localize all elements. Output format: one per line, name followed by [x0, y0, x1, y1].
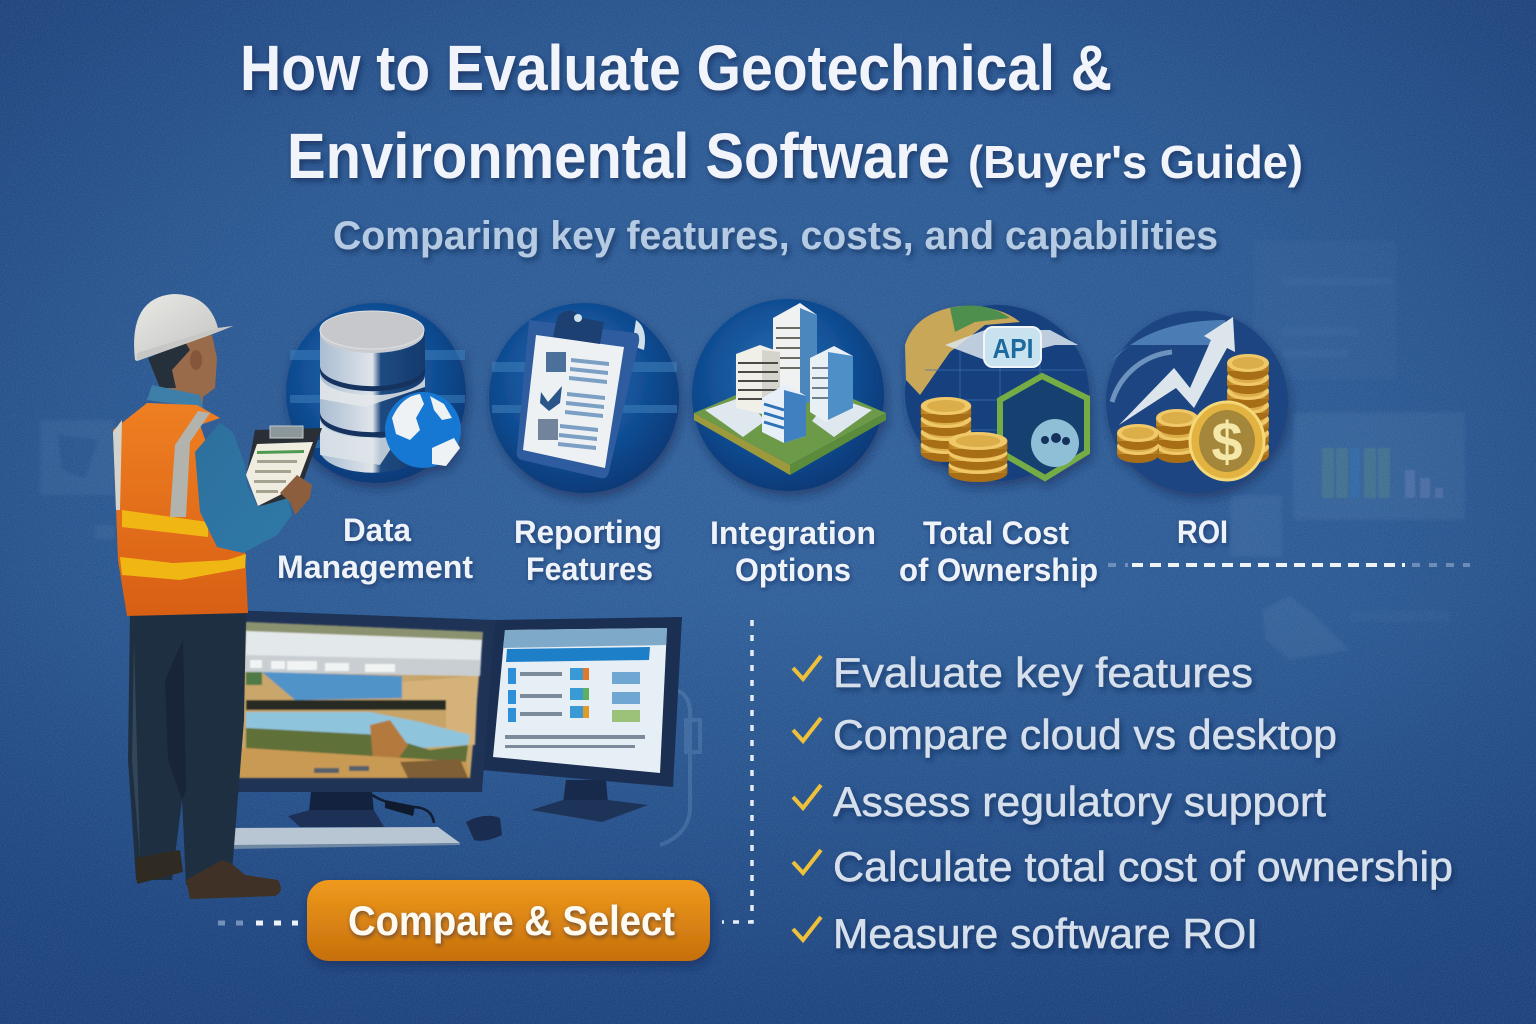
- keyboard and mouse: [231, 816, 502, 849]
- title: [240, 32, 1303, 192]
- left monitor: [225, 610, 495, 827]
- icon: total cost of ownership: API: [992, 333, 1034, 364]
- faint device ghost: [660, 690, 700, 845]
- label: roi: ROI: [1177, 514, 1228, 550]
- hand: [280, 475, 312, 515]
- figure: engineer in hard hat and vest: [113, 294, 322, 899]
- icon: roi: [1106, 311, 1288, 493]
- button: compare and select: [307, 880, 710, 961]
- label: data management: Data: [343, 512, 411, 548]
- trousers: [128, 612, 246, 885]
- dotted connectors: [218, 565, 1470, 923]
- title: Environmental Software: [287, 120, 950, 192]
- icon: data management: [286, 303, 466, 483]
- right monitor: [482, 617, 682, 822]
- hard hat: [134, 294, 233, 361]
- icon: total cost of ownership: [905, 305, 1089, 482]
- checklist: [793, 649, 1453, 957]
- icon: reporting features: [489, 303, 679, 493]
- item: measure software roi: Measure software ROI: [833, 910, 1258, 957]
- item: assess regulatory support: Assess regulatory support: [833, 778, 1326, 825]
- arm: [195, 423, 292, 553]
- icon: roi: $: [1211, 410, 1243, 473]
- item: compare cloud vs desktop: Compare cloud vs desktop: [833, 711, 1337, 758]
- boots: [135, 850, 281, 899]
- item: evaluate key features: Evaluate key features: [833, 649, 1253, 696]
- label: integration options: Options: [735, 552, 851, 588]
- tablet: [246, 426, 322, 506]
- head and neck: [148, 335, 217, 410]
- label: integration options: [710, 515, 876, 588]
- button: compare and select: Compare & Select: [348, 897, 675, 944]
- label: total cost of ownership: [899, 515, 1098, 588]
- label: reporting features: Features: [526, 551, 653, 587]
- screen: [239, 622, 483, 778]
- vest: [113, 403, 248, 616]
- label: total cost of ownership: Total Cost: [923, 515, 1069, 551]
- label: data management: [277, 512, 473, 585]
- label: reporting features: [514, 514, 662, 587]
- item: calculate total cost of ownership: Calculate total cost of ownership: [833, 843, 1453, 890]
- label: reporting features: Reporting: [514, 514, 662, 550]
- label: integration options: Integration: [710, 515, 876, 551]
- icon: integration options: [692, 299, 886, 491]
- title: (Buyer's Guide): [968, 136, 1303, 188]
- label: total cost of ownership: of Ownership: [899, 552, 1098, 588]
- title: How to Evaluate Geotechnical &: [240, 32, 1112, 104]
- shirt collar: [147, 385, 203, 408]
- label: data management: Management: [277, 549, 473, 585]
- subtitle: Comparing key features, costs, and capabilities: [333, 214, 1218, 258]
